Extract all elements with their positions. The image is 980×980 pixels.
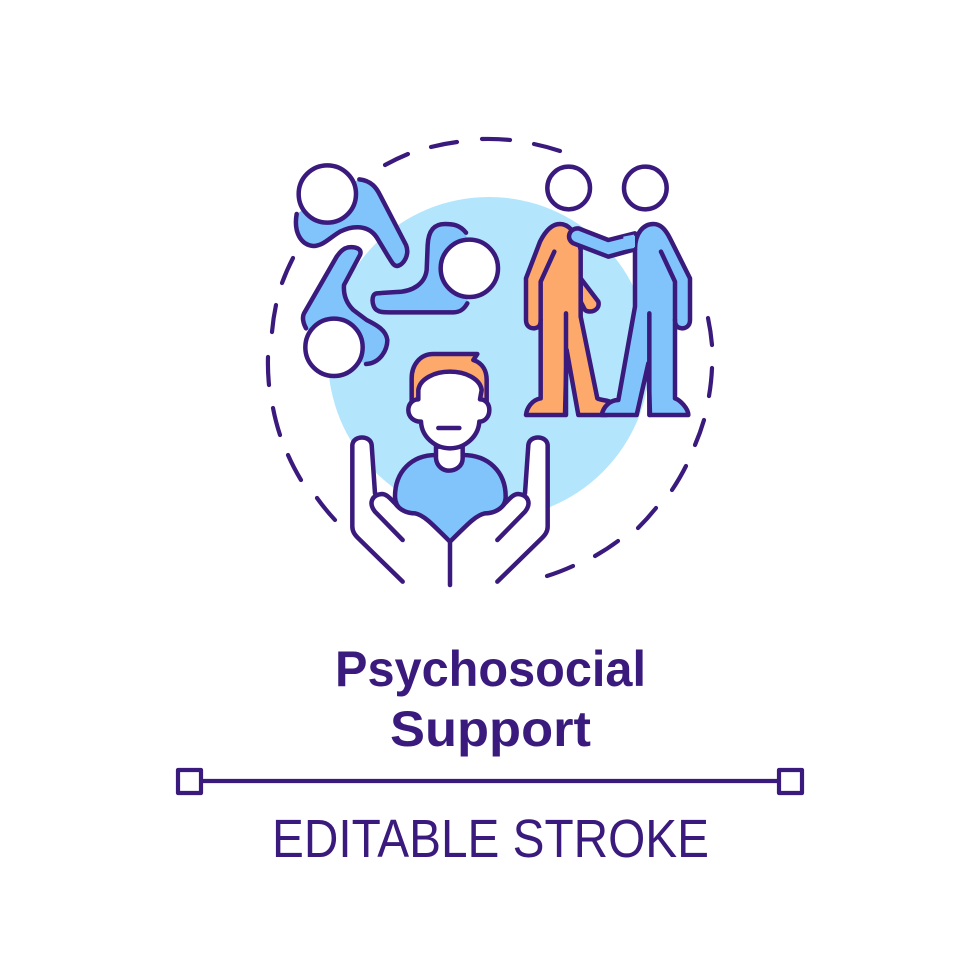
hands fill [352,437,548,587]
person A body [296,179,407,266]
person B head [441,240,498,297]
center line between hands [443,542,457,585]
person C body [303,247,387,364]
title: Psychosocial [335,641,646,697]
orange person body [526,224,610,415]
orange person hand [581,278,599,312]
person B body [373,224,469,312]
person C head [305,319,363,376]
editable stroke line with handles [178,770,802,793]
orange person head [547,167,590,209]
hair [412,354,487,403]
blue person arm [569,228,635,257]
orange person details [541,252,566,415]
arm to torso join [623,235,634,250]
right hand [450,437,548,582]
person A head [299,165,356,223]
neck [436,447,463,471]
icon: person held in hands [352,354,548,587]
dashed ring [268,139,712,576]
face [408,372,489,448]
blue person body [602,224,690,415]
background light blue circle [328,197,650,519]
blue person details [649,252,675,415]
shirt [395,455,506,542]
icon: two people with arm on shoulder [526,167,690,415]
title: Support [390,701,591,757]
caption: EDITABLE STROKE [272,809,709,869]
blue person head [624,167,667,209]
left hand [352,437,450,582]
mouth [438,421,459,435]
icon: three people group [296,165,498,376]
